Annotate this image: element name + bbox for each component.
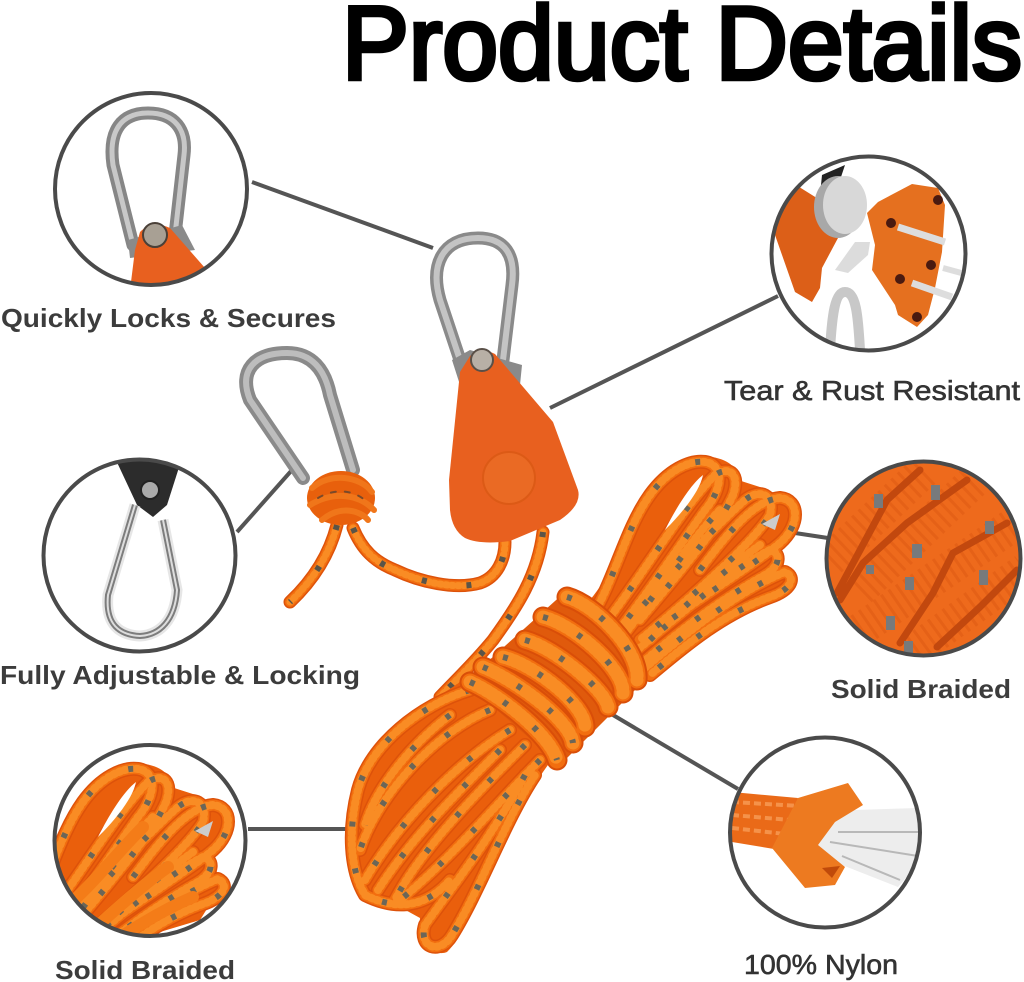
braid texture: [830, 470, 1024, 650]
circle outline: [55, 93, 247, 285]
circle detail: exploded pulley parts: [775, 165, 965, 350]
panel: solid braided coil: [52, 743, 248, 980]
circle detail: snap hook: [108, 458, 182, 636]
panel: solid braided close-up: [826, 462, 1024, 704]
circle outline: [730, 738, 920, 928]
leader line: braided right: [795, 533, 828, 538]
panel: nylon: [730, 738, 920, 980]
rope bundle: [350, 455, 799, 953]
label: Quickly Locks & Secures: [1, 303, 336, 333]
panel: quickly locks: [1, 93, 336, 333]
circle outline: [44, 460, 236, 652]
rope cords: [290, 525, 543, 697]
circle detail: rope loops: [56, 762, 235, 934]
circle outline: [826, 462, 1020, 656]
label: Tear & Rust Resistant: [724, 375, 1020, 406]
circle detail: cut rope with fibers: [732, 783, 918, 888]
circle detail: carabiner and pulley tip: [112, 113, 205, 290]
panel: tear and rust resistant: [724, 156, 1020, 406]
icon: small carabiner: [246, 353, 353, 478]
pulley body: [449, 349, 579, 542]
leader line: braided left: [248, 827, 352, 831]
label: Fully Adjustable & Locking: [0, 660, 360, 690]
label: 100% Nylon: [744, 949, 898, 980]
leader line: nylon: [613, 715, 738, 789]
leader line: quick lock: [252, 182, 433, 248]
icon: large carabiner: [437, 238, 522, 385]
circle outline: [54, 745, 246, 936]
leader line: adjustable: [237, 470, 292, 532]
circle outline: [772, 156, 966, 350]
leader line: tear resistant: [550, 296, 778, 408]
rope knot: [307, 471, 375, 525]
label: Solid Braided: [831, 674, 1011, 704]
panel: fully adjustable: [0, 458, 360, 690]
product illustration: rope hanger: [246, 238, 799, 953]
circle detail: braid close-up: [826, 462, 1024, 656]
